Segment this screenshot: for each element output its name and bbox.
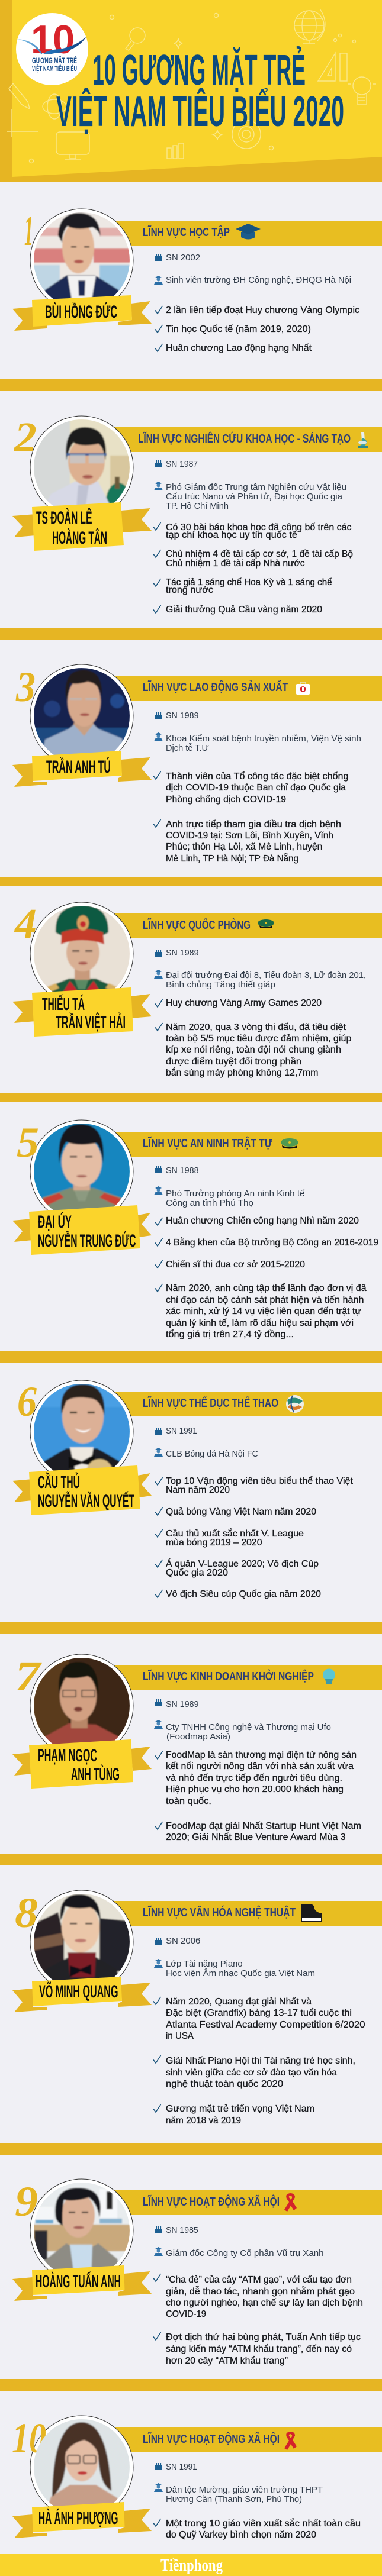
text block: achievements: Huân chương Chiến công hạng Nhì năm 2020	[166, 1216, 359, 1226]
text block: achievements: Gương mặt trẻ triển vọng Việt Nam	[166, 2104, 314, 2114]
text block: achievements: được điểm tuyệt đối trong phần	[166, 1057, 301, 1067]
text block: achievements: 2 lần liên tiếp đoạt Huy chương Vàng Olympic	[166, 305, 359, 315]
logo badge: 10	[31, 17, 75, 62]
photo portrait	[17, 1654, 134, 1744]
text block: achievements: Có 30 bài báo khoa học đã công bố trên các	[166, 522, 352, 532]
panel: person 7	[12, 1652, 382, 1842]
heading bar	[113, 676, 382, 701]
text block: achievements	[155, 1476, 354, 1599]
heading bar: LĨNH VỰC THỂ DỤC THỂ THAO	[143, 1396, 278, 1410]
panel: header	[0, 0, 382, 182]
text block: achievements: Đặc biệt (Grandfix) bảng 13-17 tuổi cuộc thi	[166, 2008, 352, 2018]
ribbon with name: ANH TÙNG	[71, 1764, 120, 1784]
icon: cake	[155, 1938, 162, 1945]
photo portrait	[15, 664, 134, 755]
ribbon with name	[12, 2265, 152, 2301]
text block: achievements: Giải thưởng Quả Cầu vàng năm 2020	[166, 605, 322, 615]
text block: achievements	[153, 2519, 361, 2540]
text block: achievements: Tin học Quốc tế (năm 2019, 2020)	[166, 324, 311, 334]
text block: personal info: SN 1991	[166, 2462, 197, 2472]
panel: person 9	[12, 2178, 382, 2366]
icon: grand piano	[301, 1904, 322, 1922]
icon: light bulb	[323, 1668, 335, 1684]
photo portrait	[15, 1890, 134, 1981]
icon: cake	[155, 712, 162, 719]
photo portrait: 9	[15, 2178, 38, 2225]
ribbon with name: TRẦN VIỆT HẢI	[56, 1012, 126, 1032]
photo portrait	[17, 1119, 134, 1210]
text block: achievements: Thành viên của Tổ công tác đặc biệt chống	[166, 771, 348, 782]
ribbon with name: TS ĐOÀN LÊ	[36, 508, 92, 528]
photo portrait	[12, 2415, 134, 2506]
ribbon with name	[12, 295, 152, 331]
heading bar: LĨNH VỰC QUỐC PHÒNG	[143, 918, 251, 932]
icon: cake	[155, 460, 162, 467]
text block: achievements	[153, 522, 353, 615]
text block: achievements	[153, 771, 348, 864]
text block: achievements: Quốc gia 2020	[166, 1568, 228, 1578]
text block: achievements	[153, 1997, 365, 2126]
icon: cake	[155, 254, 162, 261]
text block: achievements	[155, 998, 352, 1078]
text block: achievements: toàn quốc.	[166, 1796, 211, 1806]
text block: achievements: FoodMap đạt giải Nhất Startup Hunt Việt Nam	[166, 1821, 361, 1831]
icon: cake	[155, 1428, 162, 1435]
footer with publisher logo: Tiềnphong	[160, 2556, 223, 2575]
photo portrait	[25, 208, 134, 299]
panel: person 2	[12, 414, 382, 615]
icon: medical kit	[296, 682, 310, 695]
text block: achievements: kết nối người nông dân với nhà sản xuất vừa	[166, 1761, 354, 1771]
text block: achievements: Nam năm 2020	[166, 1485, 230, 1495]
icon: graduate	[154, 2483, 163, 2492]
logo badge	[16, 13, 88, 85]
text block: personal info	[154, 459, 346, 511]
ribbon with name: CẦU THỦ	[38, 1472, 80, 1492]
text block: achievements: Chủ nhiệm 1 đề tài cấp Nhà nước	[166, 559, 305, 569]
icon: cake	[155, 1699, 162, 1706]
text block: achievements	[155, 1216, 378, 1339]
text block: achievements: Năm 2020, Quang đạt giải Nhất và	[166, 1997, 312, 2007]
panel: person 8	[12, 1889, 382, 2126]
text block: achievements: Á quân V-League 2020; Vô địch Cúp	[166, 1559, 319, 1569]
text block: personal info	[154, 2462, 323, 2504]
text block: achievements: giản, dễ thao tác, nhanh gọn nhằm phát gạo	[166, 2287, 355, 2297]
text block: personal info: SN 1985	[166, 2225, 198, 2235]
text block: personal info: SN 1989	[166, 711, 199, 721]
text block: achievements: xác minh, xử lý 14 vụ việc liên quan đến trật tự	[166, 1306, 361, 1316]
ribbon with name	[12, 1205, 152, 1255]
text block: achievements: chỉ đạo cán bộ cảnh sát phát hiện và tiến hành	[166, 1295, 364, 1305]
text block: achievements: 2020; Giải Nhất Blue Venture Award Mùa 3	[166, 1832, 346, 1842]
panel: person 10	[12, 2414, 382, 2540]
heading bar: LĨNH VỰC HỌC TẬP	[143, 225, 230, 239]
heading bar	[113, 1665, 382, 1690]
text block: personal info: Binh chủng Tăng thiết giáp	[166, 980, 275, 990]
icon: red ribbon	[284, 2432, 297, 2450]
icon: graduate	[154, 276, 163, 285]
text block: achievements: và nhỏ đến trực tiếp đến người tiêu dùng.	[166, 1773, 342, 1783]
photo portrait: 7	[15, 1652, 43, 1700]
text block: personal info	[154, 1426, 258, 1459]
icon: graduate	[154, 1959, 163, 1968]
text block: achievements: dịch COVID-19 thuộc Ban chỉ đạo Quốc gia	[166, 783, 346, 793]
icon: graduate	[154, 732, 163, 741]
text block: achievements: Anh trực tiếp tham gia điều tra dịch bệnh	[166, 819, 341, 829]
text block: achievements: mùa bóng 2019 – 2020	[166, 1538, 262, 1548]
text block: achievements	[153, 2274, 363, 2366]
text block: achievements: Hiện phục vụ cho hơn 20.000 khách hàng	[166, 1784, 344, 1794]
text block: personal info: Công an tỉnh Phú Thọ	[166, 1198, 253, 1208]
text block: achievements: Đợt dịch thứ hai bùng phát, Tuấn Anh tiếp tục	[166, 2332, 361, 2342]
ribbon with name	[12, 751, 152, 787]
text block: achievements: Atlanta Festival Academy Competition 6/2020	[166, 2020, 365, 2030]
text block: personal info: Sinh viên trường ĐH Công nghệ, ĐHQG Hà Nội	[166, 275, 351, 285]
ribbon with name	[12, 1465, 152, 1515]
ribbon with name: ĐẠI ÚY	[38, 1212, 72, 1232]
heading bar: LĨNH VỰC KINH DOANH KHỞI NGHIỆP	[143, 1669, 314, 1683]
text block: achievements: sinh viên giữa các cơ sở đào tạo văn hóa	[166, 2068, 337, 2078]
text block: personal info: SN 2006	[166, 1936, 200, 1946]
text block: personal info: Dân tộc Mường, giáo viên trường THPT	[166, 2485, 323, 2495]
logo badge: GƯƠNG MẶT TRẺ	[32, 56, 77, 65]
text block: personal info: Dịch tễ T.Ư	[166, 743, 209, 753]
text block: achievements: tạp chí khoa học uy tín quốc tế	[166, 530, 297, 540]
text block: achievements: Một trong 10 giáo viên xuất sắc nhất toàn cầu	[166, 2519, 361, 2529]
text block: personal info: (Foodmap Asia)	[166, 1732, 230, 1742]
ribbon with name	[12, 2502, 152, 2538]
text block: personal info: Khoa Kiểm soát bệnh truyền nhiễm, Viện Vệ sinh	[166, 734, 361, 744]
panel: person 6	[12, 1378, 382, 1599]
text block: personal info: SN 1989	[166, 1699, 199, 1709]
title	[56, 46, 344, 135]
ribbon with name	[12, 987, 152, 1037]
text block: achievements: Tác giả 1 sáng chế Hoa Kỳ và 1 sáng chế	[166, 577, 332, 587]
text block: achievements: COVID-19	[166, 2309, 206, 2319]
ribbon with name: TRẦN ANH TÚ	[46, 757, 111, 777]
text block: achievements: Chiến sĩ thi đua cơ sở 2015-2020	[166, 1260, 305, 1270]
photo portrait: 10	[12, 2414, 46, 2462]
text block: personal info	[154, 1936, 315, 1978]
text block: personal info: Giám đốc Công ty Cổ phần Vũ trụ Xanh	[166, 2248, 324, 2258]
text block: achievements: Phòng chống dịch COVID-19	[166, 795, 286, 805]
text block: achievements: năm 2018 và 2019	[166, 2116, 241, 2126]
icon: microscope	[358, 432, 368, 448]
ribbon with name: HOÀNG TUẤN ANH	[36, 2271, 121, 2291]
ribbon with name: VÕ MINH QUANG	[39, 1981, 118, 2002]
ribbon with name	[12, 1739, 152, 1789]
ribbon with name	[12, 502, 152, 551]
text block: personal info	[154, 2225, 324, 2258]
ribbon with name	[12, 1977, 152, 2012]
icon: cake	[155, 1166, 162, 1173]
icon: graduate	[154, 2247, 163, 2256]
text block: achievements: hơn 20 cây “ATM khẩu trang”	[166, 2356, 288, 2366]
text block: achievements: kíp xe nói riêng, toàn đội nói chung giành	[166, 1045, 341, 1055]
text block: achievements: Huy chương Vàng Army Games 2020	[166, 998, 322, 1008]
photo portrait	[18, 1380, 134, 1471]
text block: achievements: FoodMap là sàn thương mại điện tử nông sản	[166, 1750, 357, 1760]
text block: achievements	[155, 305, 359, 353]
heading bar	[113, 913, 382, 938]
text block: personal info: Đại đội trưởng Đại đội 8, Tiểu đoàn 3, Lữ đoàn 201,	[166, 970, 366, 980]
text block: personal info: TP. Hồ Chí Minh	[166, 501, 229, 511]
text block: personal info: Học viện Âm nhạc Quốc gia Việt Nam	[166, 1968, 315, 1978]
text block: achievements: Mê Linh, TP Hà Nội; TP Đà Nẵng	[166, 854, 298, 864]
text block: personal info: Cty TNHH Công nghệ và Thương mại Ufo	[166, 1722, 331, 1732]
icon: graduate	[154, 482, 163, 490]
text block: personal info: SN 2002	[166, 253, 200, 263]
text block: personal info: SN 1988	[166, 1166, 199, 1176]
text block: personal info: SN 1987	[166, 459, 198, 469]
text block: achievements: Huân chương Lao động hạng Nhất	[166, 343, 312, 353]
text block: achievements: tổng giá trị trên 27,4 tỷ đồng...	[166, 1329, 294, 1339]
text block: achievements: nghệ thuật toàn quốc 2020	[166, 2079, 283, 2089]
photo portrait: 6	[17, 1378, 37, 1425]
decorative line icons	[7, 9, 376, 163]
heading bar: LĨNH VỰC HOẠT ĐỘNG XÃ HỘI	[143, 2432, 280, 2446]
ribbon with name: PHẠM NGỌC	[38, 1746, 97, 1765]
photo portrait	[14, 902, 134, 992]
text block: personal info	[154, 1699, 331, 1742]
text block: achievements: Giải Nhất Piano Hội thi Tài năng trẻ học sinh,	[166, 2056, 355, 2066]
text block: personal info: Phó Giám đốc Trung tâm Nghiên cứu Vật liệu	[166, 482, 346, 492]
heading bar: LĨNH VỰC HOẠT ĐỘNG XÃ HỘI	[143, 2194, 280, 2209]
text block: personal info	[154, 948, 366, 990]
photo portrait	[15, 2178, 134, 2270]
photo portrait: 4	[14, 900, 37, 947]
text block: personal info: SN 1991	[166, 1426, 197, 1436]
photo portrait: 3	[15, 663, 36, 711]
text block: achievements: quản lý kinh tế, làm rõ dấu hiệu sai phạm với	[166, 1318, 354, 1328]
icon: graduate	[154, 1720, 163, 1729]
text block: achievements: Top 10 Vận động viên tiêu biểu thể thao Việt	[166, 1476, 354, 1486]
heading bar: LĨNH VỰC LAO ĐỘNG SẢN XUẤT	[143, 680, 288, 694]
text block: achievements: Năm 2020, anh cùng tập thể lãnh đạo đơn vị đã	[166, 1283, 367, 1293]
ribbon with name: NGUYỄN VĂN QUYẾT	[38, 1491, 134, 1511]
icon: football	[286, 1395, 304, 1413]
text block: achievements: cho người nghèo, hạn chế sự lây lan dịch bệnh	[166, 2298, 363, 2308]
heading bar	[113, 2427, 382, 2452]
photo portrait: 2	[14, 414, 37, 461]
text block: achievements: sáng kiến máy “ATM khẩu trang”, đến nay có	[166, 2344, 352, 2354]
text block: achievements: in USA	[166, 2031, 194, 2041]
photo portrait: 1	[24, 207, 33, 254]
text block: personal info: Lớp Tài năng Piano	[166, 1959, 243, 1969]
text block: personal info	[154, 711, 361, 753]
text block: achievements	[155, 1750, 361, 1842]
photo portrait	[14, 415, 134, 506]
heading bar: LĨNH VỰC VĂN HÓA NGHỆ THUẬT	[143, 1905, 296, 1919]
heading bar	[113, 2190, 382, 2215]
text block: achievements: toàn bộ 5/5 mục tiêu được đảm nhiệm, giúp	[166, 1034, 352, 1044]
text block: achievements: Năm 2020, qua 3 vòng thi đấu, đã tiêu diệt	[166, 1022, 346, 1032]
ribbon with name: BÙI HỒNG ĐỨC	[45, 302, 117, 322]
text block: achievements: Chủ nhiệm 4 đề tài cấp cơ sở, 1 đề tài cấp Bộ	[166, 549, 353, 559]
heading bar	[113, 221, 382, 246]
icon: cake	[155, 950, 162, 957]
icon: cake	[155, 2463, 162, 2470]
ribbon with name: THIẾU TÁ	[42, 994, 85, 1014]
text block: achievements: Quả bóng Vàng Việt Nam năm 2020	[166, 1507, 316, 1517]
icon: army cap	[258, 919, 274, 928]
photo portrait: 8	[15, 1889, 38, 1936]
heading bar	[113, 1132, 382, 1157]
heading bar	[113, 427, 382, 452]
icon: police cap	[281, 1138, 298, 1149]
footer with publisher logo	[0, 2554, 382, 2576]
text block: achievements: COVID-19 tại: Sơn Lôi, Bình Xuyên, Vĩnh	[166, 831, 333, 841]
icon: red ribbon	[284, 2193, 297, 2212]
text block: personal info	[154, 253, 351, 285]
text block: personal info: Phó Trưởng phòng An ninh Kinh tế	[166, 1189, 305, 1199]
text block: achievements: do Quỹ Varkey bình chọn năm 2020	[166, 2530, 316, 2540]
heading bar	[113, 1901, 382, 1926]
text block: achievements: “Cha đẻ” của cây “ATM gạo”, với cấu tạo đơn	[166, 2275, 352, 2285]
text block: achievements: Phúc; thôn Hạ Lôi, xã Mê Linh, huyện	[166, 842, 322, 852]
icon: graduate	[154, 1186, 163, 1195]
logo badge: VIỆT NAM TIÊU BIỂU	[32, 65, 77, 73]
text block: personal info	[154, 1166, 305, 1208]
ribbon with name: HÀ ÁNH PHƯỢNG	[38, 2508, 118, 2528]
text block: achievements: Vô địch Siêu cúp Quốc gia năm 2020	[166, 1589, 321, 1599]
icon: cake	[155, 2226, 162, 2233]
ribbon with name: NGUYỄN TRUNG ĐỨC	[38, 1231, 136, 1251]
text block: achievements: Cầu thủ xuất sắc nhất V. League	[166, 1529, 304, 1539]
text block: achievements: trong nước	[166, 585, 213, 595]
heading bar: LĨNH VỰC AN NINH TRẬT TỰ	[143, 1136, 272, 1150]
text block: personal info: Hương Cần (Thanh Sơn, Phú Thọ)	[166, 2494, 302, 2504]
panel: person 4	[12, 900, 382, 1078]
text block: personal info: SN 1989	[166, 948, 199, 958]
text block: achievements: bắn súng máy phòng không 12,7mm	[166, 1068, 319, 1078]
text block: personal info: Cấu trúc Nano và Phân tử, Đại học Quốc gia	[166, 492, 343, 502]
ribbon with name: HOÀNG TÂN	[52, 528, 107, 548]
panel: person 3	[12, 663, 382, 864]
icon: graduate	[154, 970, 163, 979]
icon: graduation cap	[236, 224, 261, 239]
text block: achievements: 4 Bằng khen của Bộ trưởng Bộ Công an 2016-2019	[166, 1238, 378, 1248]
icon: graduate	[154, 1448, 163, 1457]
photo portrait: 5	[17, 1119, 39, 1166]
text block: personal info: CLB Bóng đá Hà Nội FC	[166, 1449, 258, 1459]
heading bar	[113, 1392, 382, 1416]
panel: person 5	[12, 1119, 382, 1339]
panel: person 1	[12, 207, 382, 353]
